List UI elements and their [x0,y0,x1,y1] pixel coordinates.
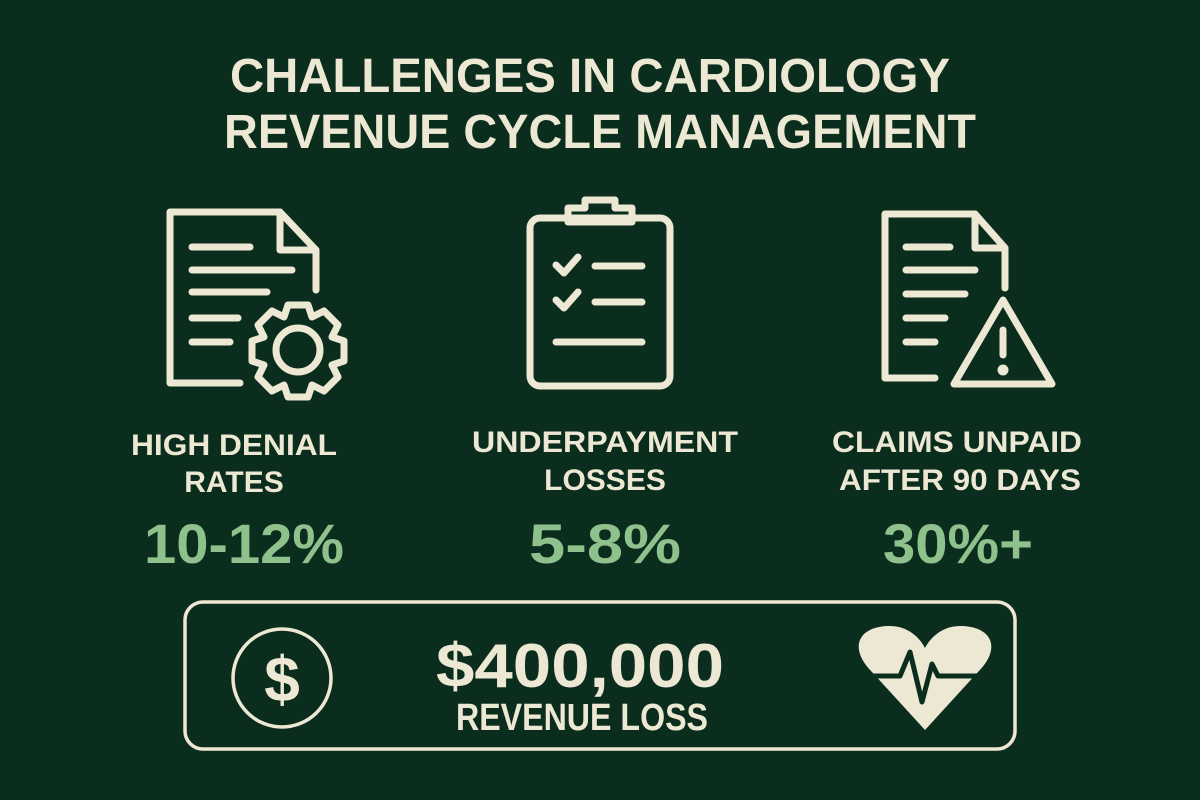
label: claims unpaid [832,426,1082,575]
icon: clipboard with checks [530,200,670,386]
label: claims unpaid: AFTER 90 DAYS [839,464,1081,497]
text: amount: REVENUE LOSS [456,697,708,739]
label: high denial rates [131,429,344,575]
label: high denial rates: 10-12% [144,512,344,575]
label: underpayment losses: UNDERPAYMENT [472,426,738,459]
label: claims unpaid: CLAIMS UNPAID [832,426,1082,459]
panel: revenue loss [185,602,1015,749]
label: high denial rates: RATES [184,466,284,499]
label: underpayment losses: LOSSES [544,464,666,497]
title [224,50,976,159]
label: underpayment losses: 5-8% [529,512,681,575]
icon: document with gear [170,212,344,397]
icon: document with warning [885,214,1052,384]
title: REVENUE CYCLE MANAGEMENT [224,106,976,159]
title: CHALLENGES IN CARDIOLOGY [230,50,950,103]
label: high denial rates: HIGH DENIAL [131,429,337,462]
text: amount: $400,000 [436,632,724,701]
icon: heart [858,626,992,730]
text: amount [436,632,724,739]
label: underpayment losses [472,426,738,575]
icon: dollar: $ [264,643,300,715]
label: claims unpaid: 30%+ [883,512,1033,575]
icon: dollar [233,629,331,727]
